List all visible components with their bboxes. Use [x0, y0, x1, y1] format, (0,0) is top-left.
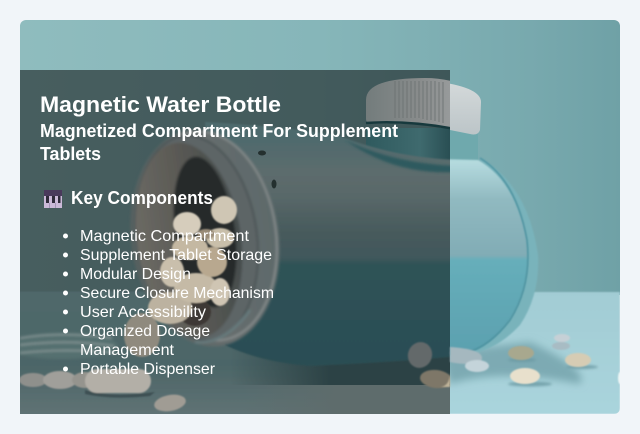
list: key components: User Accessibility: [80, 304, 206, 321]
subtitle: Magnetized Compartment For Supplement: [40, 121, 398, 141]
table shadow under bottle: [440, 342, 581, 384]
cap (right part): [440, 82, 481, 134]
heading: key components: Key Components: [71, 188, 213, 208]
table surface: [450, 292, 620, 414]
list: key components: Secure Closure Mechanism: [80, 285, 274, 302]
neck: [366, 128, 450, 160]
body seam: [466, 158, 528, 353]
tablets on the left table: [19, 369, 187, 414]
subtitle: Tablets: [40, 144, 101, 164]
body: [205, 122, 460, 366]
list: key components: Management: [80, 342, 175, 359]
rim vent holes: [258, 150, 276, 188]
list: key components: [63, 228, 274, 378]
list: key components: Portable Dispenser: [80, 361, 216, 378]
title: Magnetic Water Bottle: [40, 92, 281, 117]
bottle neck (right part): [450, 130, 478, 160]
list: key components: Magnetic Compartment: [80, 228, 250, 245]
tablets beneath the bottle: [407, 342, 450, 388]
mouth rim: [130, 128, 280, 347]
glass ring on the table: [20, 332, 116, 358]
floor shadow: [250, 356, 450, 385]
icon: piano keys: [44, 190, 62, 208]
outer lobe of the bottle: [476, 160, 538, 351]
scene inside the panel: [20, 78, 450, 414]
list: key components: Organized Dosage: [80, 323, 210, 340]
wall: [20, 20, 620, 295]
dark overlay panel: [20, 70, 450, 414]
subtitle: [40, 121, 398, 164]
list: key components: Supplement Tablet Storage: [80, 247, 272, 264]
tablets on the right table: [440, 334, 622, 387]
cap: [366, 78, 450, 130]
list: key components: Modular Design: [80, 266, 191, 283]
bottle body (right part): [450, 158, 527, 355]
tablets inside the bottle: [124, 196, 237, 357]
lower floor: [330, 385, 450, 414]
left table: [20, 295, 267, 414]
